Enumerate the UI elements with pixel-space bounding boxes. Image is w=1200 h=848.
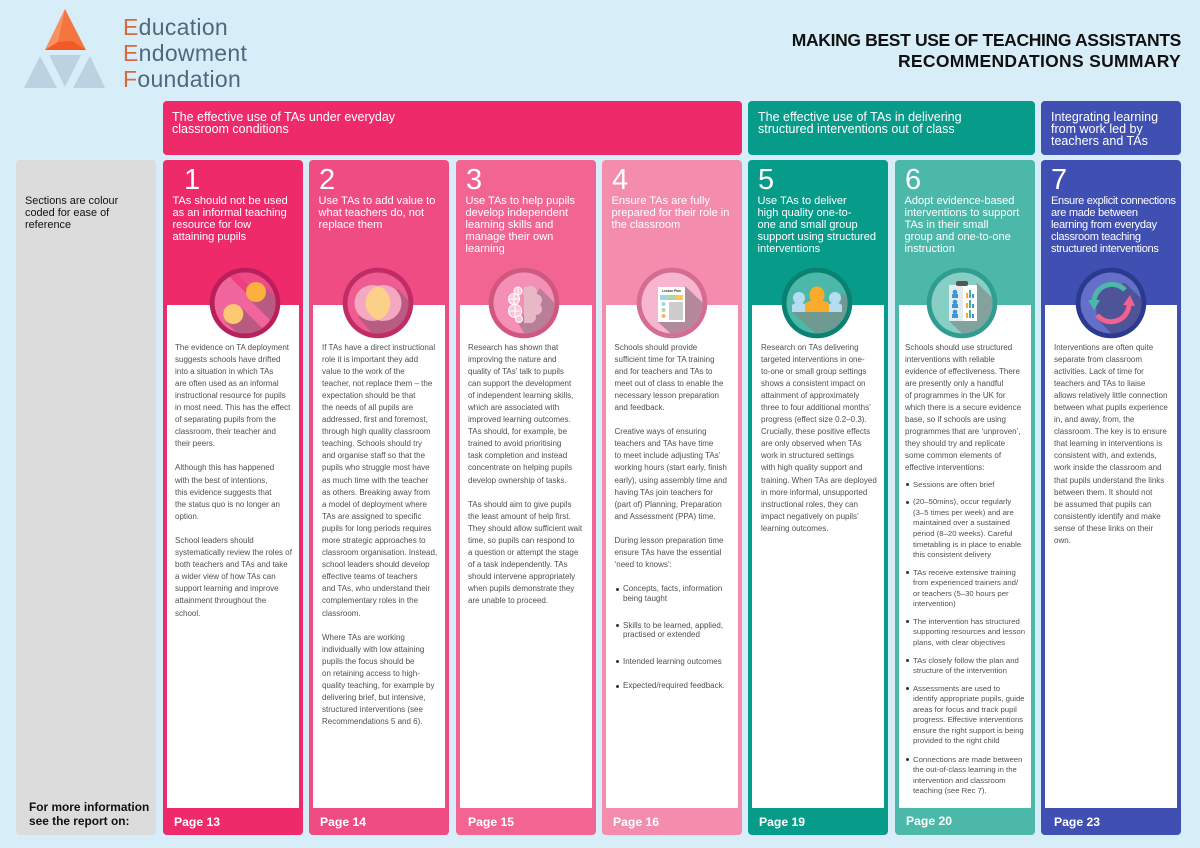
bullet list: recommendation 6: supporting resources and lesson <box>913 627 1025 636</box>
text block: recommendation 1 body: a wider view of how TAs can <box>175 572 276 581</box>
text block: recommendation 3 body: task completion and instead <box>468 451 567 460</box>
text block: recommendation 3 body: Research has shown that <box>468 342 558 352</box>
heading 5: interventions <box>758 243 820 255</box>
text block: recommendation 2 body: pupils who struggle most have <box>322 463 430 472</box>
text block: recommendation 7 body: that pupils understand the links <box>1054 476 1164 485</box>
text block: recommendation 1 body: School leaders should <box>175 536 254 545</box>
section header: structured interventions: structured interventions out of class <box>758 122 955 136</box>
text block: recommendation 6 body <box>905 342 1021 472</box>
sidebar footer <box>29 800 149 828</box>
bullet list: recommendation 6: Connections are made between <box>913 754 1022 764</box>
text block: recommendation 3 body: of a task independently. TAs <box>468 560 568 569</box>
heading 7: structured interventions <box>1051 243 1159 255</box>
text block: recommendation 2 body <box>322 342 437 726</box>
page reference 16: Page 16 <box>613 815 659 829</box>
text block: recommendation 4 body: Schools should provide <box>614 342 697 352</box>
panel: recommendation 1 <box>163 160 303 835</box>
heading 3: develop independent <box>466 207 568 219</box>
text block: recommendation 5 body: with high quality support and <box>761 463 862 472</box>
sidebar note <box>25 195 118 231</box>
section header: everyday classroom conditions: The effective use of TAs under everyday <box>172 110 395 124</box>
text block: recommendation 2 body: delivering brief, but intensive, <box>322 693 426 702</box>
logo wordmark <box>123 14 247 92</box>
text block: recommendation 4 body: (part of) Planning, Preparation <box>614 500 722 509</box>
text block: recommendation 4 body: During lesson preparation time <box>614 536 723 545</box>
text block: recommendation 7 body: consistent with, and extends, <box>1054 451 1157 460</box>
heading 5: one and small group <box>758 219 858 231</box>
bullet list: recommendation 6: intervention and classroom <box>913 776 1006 785</box>
logo <box>24 9 247 92</box>
logo mark <box>24 9 105 88</box>
heading 4 <box>612 195 729 231</box>
icon: brain with gears <box>488 268 560 338</box>
text block: recommendation 1 body: with the best of intentions, <box>175 476 268 485</box>
text block: recommendation 4 body: sufficient time for TA training <box>614 355 715 364</box>
text block: recommendation 2 body: role it is important they add <box>322 355 418 364</box>
text block: recommendation 2 body: and organise staff so that the <box>322 451 425 460</box>
text block: recommendation 2 body: school leaders should develop <box>322 560 430 569</box>
icon: circular arrows <box>1076 268 1146 338</box>
text block: recommendation 3 body: of independent learning skills, <box>468 391 573 400</box>
text block: recommendation 3 body <box>468 342 582 605</box>
text block: recommendation 6 body: are presently only a handful <box>905 379 1003 388</box>
text block: recommendation 7 body: activities. Lack of time for <box>1054 367 1144 376</box>
text block: recommendation 3 body: should intervene appropriately <box>468 572 575 581</box>
text block: recommendation 3 body: when pupils demonstrate they <box>468 584 574 593</box>
heading 2: replace them <box>318 219 382 231</box>
text block: recommendation 3 body: time, so pupils can respond to <box>468 536 574 545</box>
heading 7: Ensure explicit connections <box>1051 195 1176 207</box>
text block: recommendation 1 body: instructional resource for pupils <box>175 391 286 400</box>
heading 1 <box>172 195 288 243</box>
heading 1: as an informal teaching <box>172 207 287 219</box>
text block: recommendation 4 body: and Assessment (PPA) time. <box>614 512 716 521</box>
text block: recommendation 1 body: suggests schools have drifted <box>175 355 280 364</box>
text block: recommendation 1 body: in most need. This has the effect <box>175 403 290 412</box>
heading 4: prepared for their role in <box>612 207 729 219</box>
text block: recommendation 2 body: structured interventions (see <box>322 705 423 714</box>
bullet list: recommendation 6: TAs receive extensive training <box>913 568 1016 576</box>
bullet list: recommendation 4: Concepts, facts, information <box>623 584 722 593</box>
text block: recommendation 4 body: ensure TAs have the essential <box>614 548 721 557</box>
text block: recommendation 4 body: meet out of class to enable the <box>614 379 723 388</box>
text block: recommendation 1 body: classroom, their teacher and <box>175 427 276 436</box>
text block: recommendation 1 body: option. <box>175 512 199 521</box>
text block: recommendation 2 body: If TAs have a direct instructional <box>322 342 435 352</box>
text block: recommendation 3 body: develop ownership of tasks. <box>468 476 567 485</box>
page reference 14: Page 14 <box>320 815 366 829</box>
logo wordmark: Endowment <box>123 40 247 66</box>
heading 2: what teachers do, not <box>318 207 424 219</box>
sidebar footer: see the report on: <box>29 814 129 828</box>
panel: recommendation 4 <box>602 160 742 835</box>
icon: lesson plan sheet <box>636 268 708 338</box>
bullet list: recommendation 4: Skills to be learned, applied, <box>623 620 723 630</box>
text block: recommendation 1 body: their peers. <box>175 439 215 448</box>
heading 6: instruction <box>904 243 955 255</box>
logo wordmark: Education <box>123 14 228 40</box>
bullet list: recommendation 6: ensure the right support is being <box>913 726 1024 735</box>
icon: group of people <box>782 268 852 338</box>
text block: recommendation 1 body: systematically review the roles of <box>175 548 292 557</box>
page reference 23: Page 23 <box>1054 815 1100 829</box>
text block: recommendation 4 body: early), using assembly time and <box>614 476 727 485</box>
text block: recommendation 4 body: and feedback. <box>614 403 665 412</box>
panel: recommendation 3 <box>456 160 596 835</box>
heading 5: Use TAs to deliver <box>758 195 847 207</box>
heading 7: learning from everyday <box>1051 219 1157 231</box>
text block: recommendation 6 body: effective interventions: <box>905 463 984 472</box>
text block: recommendation 6 body: which there is a secure evidence <box>905 403 1021 412</box>
text block: recommendation 5 body: impact negatively on pupils’ <box>761 512 859 521</box>
text block: recommendation 7 body: between them. It should not <box>1054 488 1152 497</box>
sidebar note: reference <box>25 219 71 231</box>
title: RECOMMENDATIONS SUMMARY <box>898 50 1181 70</box>
heading 7: are made between <box>1051 207 1138 219</box>
text block: recommendation 3 body: the least amount of help first. <box>468 512 571 521</box>
text block: recommendation 3 body: concentrate on helping pupils <box>468 463 572 472</box>
panel: recommendation 2 <box>309 160 449 835</box>
text block: recommendation 4 body: teachers and TAs have time <box>614 439 713 448</box>
panel: recommendation 5 <box>748 160 888 835</box>
text block: recommendation 3 body: improving the nature and <box>468 355 556 364</box>
bullet list: recommendation 6: areas for focus and track pupil <box>913 705 1017 714</box>
text block: recommendation 5 body: three to four additional months’ <box>761 403 871 412</box>
text block: recommendation 6 body: some common elements of <box>905 451 1001 460</box>
panel: recommendation 6 <box>895 160 1035 835</box>
bullet list: recommendation 6: from experienced trainers and/ <box>913 578 1018 587</box>
text block: recommendation 4 body: necessary lesson preparation <box>614 391 719 400</box>
text block: recommendation 2 body: and TAs, who understand their <box>322 584 430 593</box>
text block: recommendation 7 body: teachers and TAs to liaise <box>1054 379 1145 388</box>
panel: colour key sidebar <box>16 160 156 835</box>
text block: recommendation 3 body: a question or attempt the stage <box>468 548 578 557</box>
text block: recommendation 4 body: Creative ways of ensuring <box>614 427 707 436</box>
text block: recommendation 5 body: in more informal, unsupported <box>761 488 867 497</box>
text block: recommendation 2 body: through high quality classroom <box>322 427 431 436</box>
text block: recommendation 1 body: school. <box>175 609 200 618</box>
sidebar note: coded for ease of <box>25 207 109 219</box>
text block: recommendation 7 body: consistently identify and make <box>1054 512 1161 521</box>
heading 6: TAs in their small <box>904 219 988 231</box>
text block: recommendation 2 body: more strategic approaches to <box>322 536 426 545</box>
number 5: 5 <box>758 164 774 196</box>
heading 6: Adopt evidence-based <box>904 195 1014 207</box>
section header: everyday classroom conditions: classroom conditions <box>172 122 289 136</box>
text block: recommendation 5 body: shows a consistent impact on <box>761 379 866 388</box>
text block: recommendation 7 body: Interventions are often quite <box>1054 342 1153 352</box>
text block: recommendation 2 body: pupils the focus should be <box>322 657 415 666</box>
text block: recommendation 7 body: separate from classroom <box>1054 355 1142 364</box>
text block: recommendation 2 body: on retaining access to high- <box>322 669 420 678</box>
bullet list: recommendation 6: identify appropriate pupils, guide <box>913 694 1025 703</box>
number 3: 3 <box>466 164 482 196</box>
text block: recommendation 7 body: allows relatively little connection <box>1054 391 1167 400</box>
section header: integrating learning <box>1041 101 1181 155</box>
text block: recommendation 5 body: instructional roles, they can <box>761 500 858 509</box>
heading 1: attaining pupils <box>172 231 246 243</box>
text block: recommendation 6 body: of programmes in the UK for <box>905 391 1005 400</box>
text block: recommendation 5 body <box>761 342 877 533</box>
text block: recommendation 3 body: quality of TAs’ talk to pupils <box>468 367 564 376</box>
section header: structured interventions <box>748 101 1035 155</box>
sidebar note: Sections are colour <box>25 195 118 207</box>
text block: recommendation 6 body: evidence of effectiveness. There <box>905 367 1020 376</box>
text block: recommendation 2 body: teaching. Schools should try <box>322 439 422 448</box>
bullet list: recommendation 6: (20–50mins), occur regularly <box>913 497 1011 506</box>
text block: recommendation 5 body: training. When TAs are deployed <box>761 476 877 485</box>
text block: recommendation 4 body: ‘need to knows’: <box>614 560 672 569</box>
text block: recommendation 5 body: learning outcomes. <box>761 524 829 533</box>
text block: recommendation 7 body: work inside the classroom and <box>1054 463 1162 472</box>
text block: recommendation 2 body: teacher, not replace them – the <box>322 379 432 388</box>
text block: recommendation 3 body: trained to avoid prioritising <box>468 439 561 448</box>
text block: recommendation 2 body: classroom. <box>322 609 361 618</box>
text block: recommendation 7 body: that learning in interventions is <box>1054 439 1162 448</box>
number 6: 6 <box>905 164 921 196</box>
bullet list: recommendation 4: practised or extended <box>623 630 700 639</box>
text block: recommendation 7 body <box>1054 342 1168 545</box>
heading 7: classroom teaching <box>1051 231 1141 243</box>
text block: recommendation 1 body: support learning and improve <box>175 584 279 593</box>
text block: recommendation 3 body: which are associated with <box>468 403 559 412</box>
text block: recommendation 6 body: they should try and replicate <box>905 439 1005 448</box>
text block: recommendation 1 body: are often used as an informal <box>175 379 279 388</box>
section header: integrating learning: Integrating learning <box>1051 110 1158 124</box>
text block: recommendation 4 body: and for teachers and TAs to <box>614 367 712 376</box>
heading 1: resource for low <box>172 219 251 231</box>
text block: recommendation 6 body: Schools should use structured <box>905 342 1012 352</box>
section header: everyday classroom conditions <box>163 101 742 155</box>
page reference 20: Page 20 <box>906 814 952 828</box>
text block: recommendation 3 body: They should allow sufficient wait <box>468 524 582 533</box>
section header: integrating learning: teachers and TAs <box>1051 134 1148 148</box>
text block: recommendation 2 body: expectation should be that <box>322 391 415 400</box>
heading 6 <box>904 195 1020 255</box>
text block: recommendation 1 body: into a situation in which TAs <box>175 367 273 376</box>
text block: recommendation 6 body: programmes that are ‘unproven’, <box>905 427 1021 436</box>
text block: recommendation 5 body: Crucially, these positive effects <box>761 427 870 436</box>
bullet list: recommendation 6: Sessions are often brief <box>913 480 994 488</box>
icon: two separated circles <box>210 268 280 338</box>
text block: recommendation 4 body: working hours (start early, finish <box>614 463 727 472</box>
heading 6: interventions to support <box>904 207 1019 219</box>
text block: recommendation 2 body: individually with low attaining <box>322 645 424 654</box>
text block: recommendation 7 body: between what pupils experience <box>1054 403 1168 412</box>
text block: recommendation 5 body: attainment of approximately <box>761 391 859 400</box>
section header: integrating learning: from work led by <box>1051 122 1143 136</box>
number 4: 4 <box>612 164 628 196</box>
heading 5: support using structured <box>758 231 876 243</box>
heading 4: the classroom <box>612 219 680 231</box>
text block: recommendation 2 body: addressed, first and foremost, <box>322 415 428 424</box>
icon: overlapping circles <box>342 268 414 338</box>
text block: recommendation 7 body: in, and away, from, the <box>1054 415 1134 424</box>
text block: recommendation 2 body: value to the work of the <box>322 367 405 376</box>
panel: recommendation 7 <box>1041 160 1181 835</box>
text block: recommendation 3 body: improved learning outcomes. <box>468 415 571 424</box>
text block: recommendation 2 body: as others. Breaking away from <box>322 488 430 497</box>
bullet list: recommendation 6: period (8–20 weeks). Careful <box>913 529 1013 538</box>
text block: recommendation 2 body: a model of deployment where <box>322 500 427 509</box>
text block: recommendation 2 body: the needs of all pupils are <box>322 403 413 412</box>
text block: recommendation 7 body: own. <box>1054 536 1071 545</box>
text block: recommendation 1 body: attainment throughout the <box>175 596 266 605</box>
number 7: 7 <box>1051 164 1067 196</box>
text block: recommendation 5 body: to-one or small group settings <box>761 367 866 376</box>
heading 2: Use TAs to add value to <box>318 195 435 207</box>
lesson plan page: Lesson Plan <box>662 289 681 293</box>
number 2: 2 <box>319 164 335 196</box>
text block: recommendation 2 body: pupils for long periods requires <box>322 524 431 533</box>
bullet list: recommendation 6: The intervention has structured <box>913 616 1020 626</box>
text block: recommendation 4 body: having TAs join teachers for <box>614 488 713 497</box>
text block: recommendation 2 body: classroom organisation. Instead, <box>322 548 437 557</box>
heading 5: high quality one-to- <box>758 207 851 219</box>
text block: recommendation 2 body: complementary roles in the <box>322 596 418 605</box>
page reference 19: Page 19 <box>759 815 805 829</box>
page reference 13: Page 13 <box>174 815 220 829</box>
text block: recommendation 5 body: Research on TAs delivering <box>761 342 859 352</box>
text block: recommendation 5 body: progress (effect size 0.2–0.3). <box>761 415 867 424</box>
heading 1: TAs should not be used <box>172 195 288 207</box>
icon: clipboard with charts <box>926 268 998 338</box>
bullet list: recommendation 6: maintained over a sustained <box>913 518 1010 527</box>
text block: recommendation 3 body: TAs should, for example, be <box>468 427 567 436</box>
text block: recommendation 4 body <box>614 342 727 569</box>
heading 7 <box>1051 195 1176 255</box>
heading 3: manage their own <box>466 231 553 243</box>
text block: recommendation 1 body: of separating pupils from the <box>175 415 276 424</box>
text block: recommendation 5 body: are only observed when TAs <box>761 439 862 448</box>
bullet list: recommendation 6: or teachers (5–30 hours per <box>913 589 1009 598</box>
text block: recommendation 1 body <box>175 342 292 618</box>
text block: recommendation 2 body: quality teaching, for example by <box>322 681 435 690</box>
heading 5 <box>758 195 876 255</box>
text block: recommendation 1 body: this evidence suggests that <box>175 488 272 497</box>
section header: structured interventions: The effective use of TAs in delivering <box>758 110 962 124</box>
bullet list: recommendation 6: teaching (see Rec 7). <box>913 786 987 795</box>
text block: recommendation 1 body: the status quo is no longer an <box>175 500 280 509</box>
bullet list: recommendation 4: being taught <box>623 594 667 603</box>
text block: recommendation 6 body: base, so if schools are using <box>905 415 1006 424</box>
text block: recommendation 1 body: Although this has happened <box>175 463 274 472</box>
heading 3: learning <box>466 243 505 255</box>
bullet list: recommendation 6: intervention) <box>913 599 956 608</box>
heading 4: Ensure TAs are fully <box>612 195 710 207</box>
bullet list: recommendation 6: structure of the intervention <box>913 666 1007 675</box>
bullet list: recommendation 6: this consistent delivery <box>913 550 991 559</box>
title <box>792 30 1181 70</box>
page reference 15: Page 15 <box>468 815 514 829</box>
text block: recommendation 7 body: sense of these links on their <box>1054 524 1153 533</box>
bullet list: recommendation 6: progress. Effective interventions <box>913 715 1023 724</box>
text block: recommendation 7 body: classroom. The key is to ensure <box>1054 427 1167 436</box>
text block: recommendation 3 body: TAs should aim to give pupils <box>468 500 571 509</box>
bullet list: recommendation 4 <box>616 584 725 690</box>
bullet list: recommendation 6: Assessments are used to <box>913 684 1000 692</box>
number 1: 1 <box>184 164 200 196</box>
text block: recommendation 1 body: both teachers and TAs and take <box>175 560 288 569</box>
bullet list: recommendation 6: plans, with clear objectives <box>913 638 1005 647</box>
text block: recommendation 2 body: TAs are assigned to specific <box>322 512 421 521</box>
bullet list: recommendation 4: Expected/required feedback. <box>623 681 725 690</box>
text block: recommendation 1 body: The evidence on TA deployment <box>175 342 289 352</box>
text block: recommendation 2 body: Where TAs are working <box>322 633 405 642</box>
logo wordmark: Foundation <box>123 66 241 92</box>
bullet list: recommendation 6: timetabling is in place to enable <box>913 540 1021 549</box>
text block: recommendation 2 body: as much time with the teacher <box>322 476 428 485</box>
text block: recommendation 6 body: interventions with reliable <box>905 355 995 364</box>
text block: recommendation 2 body: Recommendations 5 and 6). <box>322 717 422 726</box>
text block: recommendation 4 body: to meet include adjusting TAs’ <box>614 451 720 460</box>
text block: recommendation 5 body: work in structured settings <box>761 451 854 460</box>
text block: recommendation 2 body: effective teams of teachers <box>322 572 417 581</box>
text block: recommendation 3 body: are unable to proceed. <box>468 596 548 605</box>
bullet list: recommendation 6: provided to the right child <box>913 736 1000 745</box>
bullet list: recommendation 6 <box>906 480 1025 795</box>
heading 3: Use TAs to help pupils <box>466 195 575 207</box>
bullet list: recommendation 4: Intended learning outcomes <box>623 656 722 666</box>
heading 3: learning skills and <box>466 219 553 231</box>
heading 2 <box>318 195 435 231</box>
title: MAKING BEST USE OF TEACHING ASSISTANTS <box>792 30 1181 50</box>
text block: recommendation 7 body: be assumed that pupils can <box>1054 500 1151 509</box>
heading 6: group and one-to-one <box>904 231 1011 243</box>
text block: recommendation 3 body: can support the development <box>468 379 571 388</box>
bullet list: recommendation 6: TAs closely follow the plan and <box>913 656 1019 664</box>
bullet list: recommendation 6: (3–5 times per week) and are <box>913 508 1014 517</box>
text block: recommendation 5 body: targeted interventions in one- <box>761 355 865 364</box>
sidebar footer: For more information <box>29 800 149 814</box>
heading 3 <box>466 195 575 255</box>
bullet list: recommendation 6: the out-of-class learning in the <box>913 765 1017 774</box>
